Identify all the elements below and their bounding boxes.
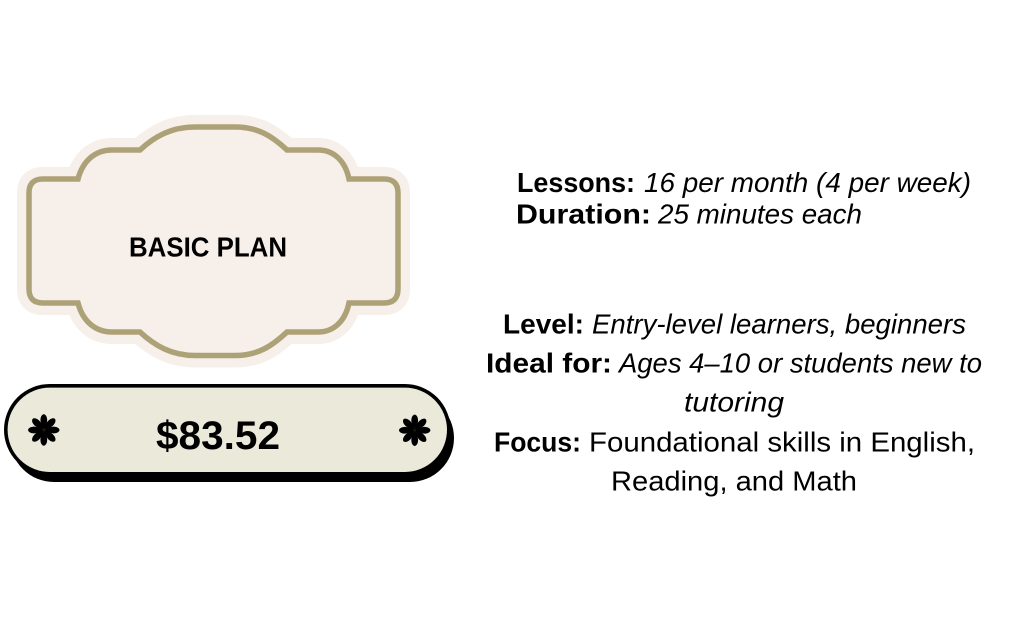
badge halo (29, 127, 398, 356)
badge title: BASIC PLAN (129, 232, 287, 262)
icon: left flower (28, 414, 60, 446)
panel: plan badge (29, 127, 398, 356)
level line: Level: (503, 308, 584, 340)
level line: Entry-level learners, beginners (592, 308, 966, 340)
ideal for lines: Ideal for: (486, 348, 612, 378)
duration line: Duration: (516, 198, 651, 230)
text block: level, ideal for and focus (486, 308, 982, 496)
icon: right flower (399, 415, 430, 446)
ideal for lines (486, 348, 982, 418)
focus lines: Reading, and Math (611, 466, 857, 496)
focus lines: Foundational skills in English, (589, 426, 975, 458)
text block: lessons and duration (516, 167, 971, 230)
duration line: 25 minutes each (657, 198, 862, 230)
ideal for lines: tutoring (684, 386, 785, 418)
badge outline (29, 127, 398, 356)
lessons line: Lessons: (517, 167, 635, 198)
duration line (516, 198, 862, 230)
focus lines (494, 426, 975, 496)
lessons line: 16 per month (4 per week) (644, 167, 971, 198)
price: $83.52 (156, 414, 280, 458)
focus lines: Focus: (494, 426, 581, 458)
panel: price pill (6, 386, 454, 482)
pill body (6, 386, 449, 474)
ideal for lines: Ages 4–10 or students new to (617, 348, 982, 378)
pill shadow (10, 394, 454, 482)
